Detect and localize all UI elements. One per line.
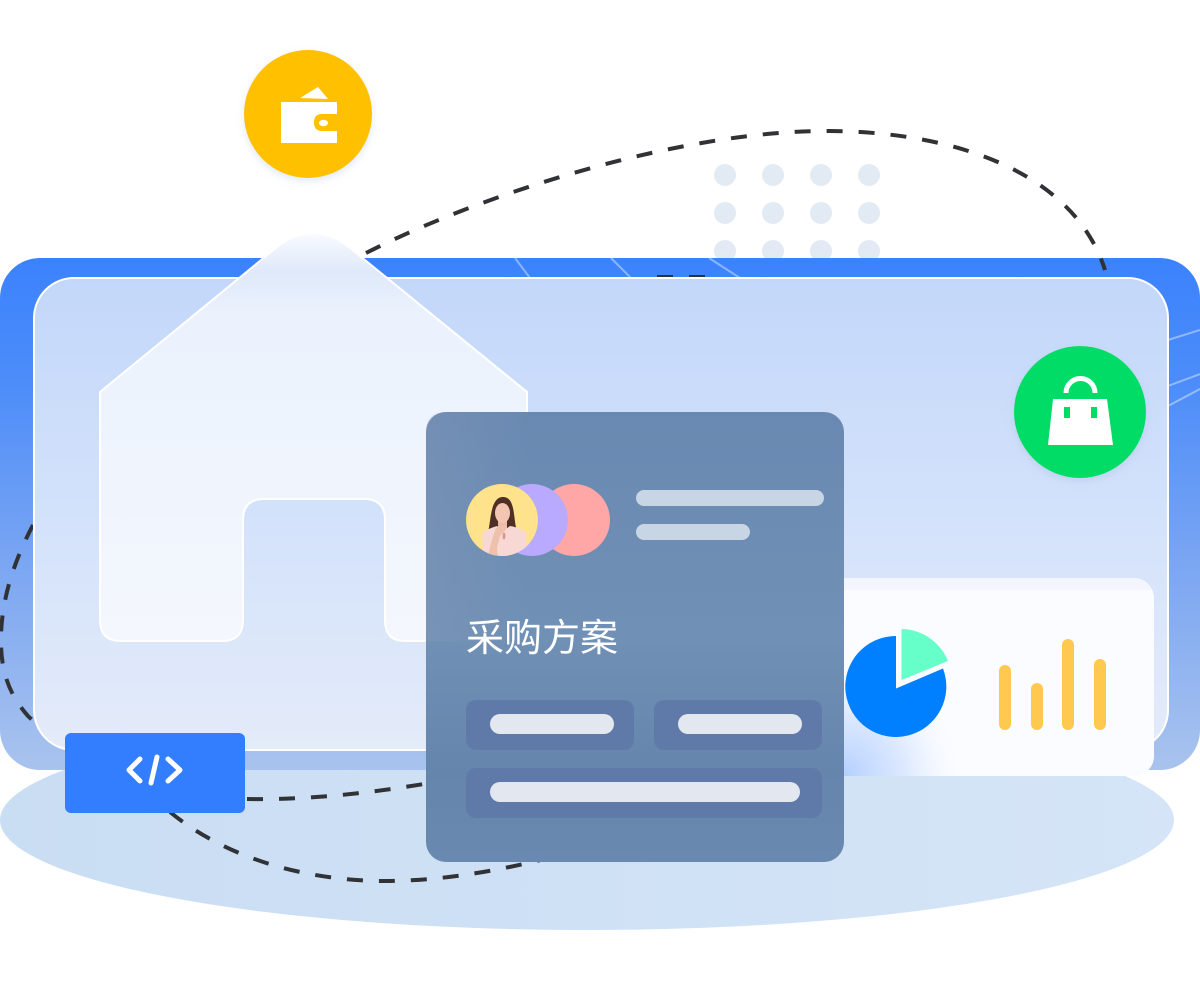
inner glass panel bbox=[34, 278, 1168, 750]
dot grid bbox=[714, 164, 880, 262]
ground ellipse bbox=[0, 710, 1174, 930]
chart panel bbox=[844, 578, 1154, 776]
avatar: woman portrait bbox=[482, 497, 527, 560]
bar chart bbox=[999, 639, 1106, 730]
icon: wallet badge bbox=[244, 50, 372, 178]
option button wide bbox=[466, 768, 822, 818]
dashed route lines bbox=[1, 131, 1105, 881]
card title: 采购方案 bbox=[466, 618, 618, 660]
header placeholder lines bbox=[636, 490, 824, 540]
avatar group bbox=[466, 484, 610, 560]
icon: shopping bag badge bbox=[1014, 346, 1146, 478]
main card bbox=[426, 412, 844, 862]
option button left bbox=[466, 700, 634, 750]
light streaks on band bbox=[515, 258, 1200, 406]
pie chart bbox=[845, 629, 948, 737]
house shape bbox=[100, 233, 527, 641]
blue background band bbox=[0, 258, 1200, 770]
option button right bbox=[654, 700, 822, 750]
icon: code tag button bbox=[65, 733, 245, 813]
